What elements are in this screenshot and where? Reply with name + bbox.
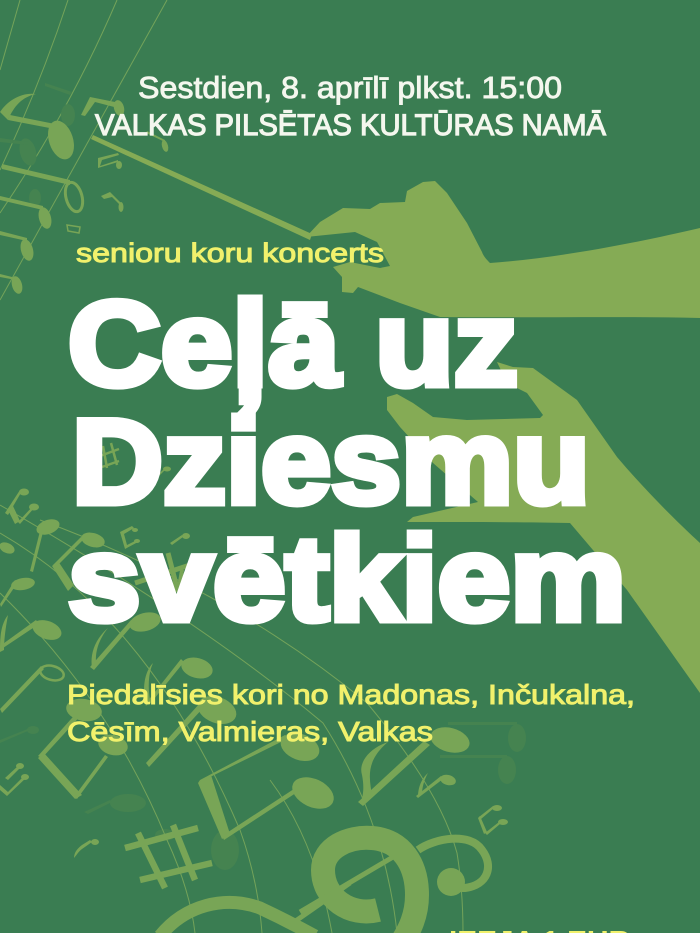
main title (68, 277, 626, 646)
main title: Ceļā uz (68, 277, 518, 412)
icon: music notes top-left (0, 94, 169, 295)
participating choirs: Piedalīsies kori no Madonas, Inčukalna, (67, 679, 635, 710)
icon: music notes bottom-left (0, 466, 508, 858)
icon: faint music notes (0, 83, 526, 870)
icon: lower conductor hand (387, 362, 700, 693)
icon: curved staff lines bottom-left (0, 505, 463, 933)
icon: sharp signs (100, 443, 212, 888)
staff lines top-left (0, 0, 167, 300)
participating choirs: Cēsīm, Valmieras, Valkas (67, 716, 433, 747)
icon: conductor baton (91, 135, 312, 240)
main title: svētkiem (68, 512, 626, 646)
icon: treble clef (160, 838, 488, 933)
venue: VALKAS PILSĒTAS KULTŪRAS NAMĀ (95, 109, 606, 142)
main title: Dziesmu (72, 395, 590, 529)
date and time: Sestdien, 8. aprīlī plkst. 15:00 (138, 70, 562, 105)
participating choirs (67, 679, 635, 747)
icon: upper conductor hand (306, 181, 700, 318)
subtitle: senioru koru koncerts (76, 238, 384, 268)
